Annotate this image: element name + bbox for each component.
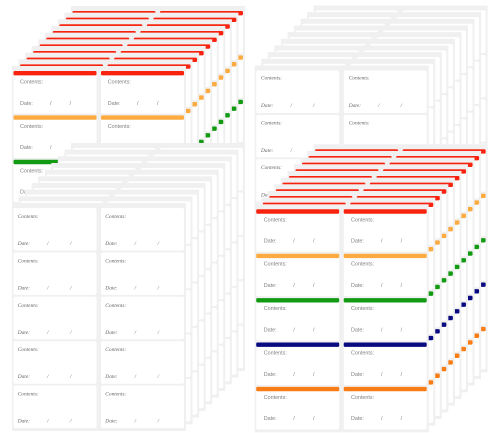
text: coloured labels, front sheet: /	[381, 416, 383, 422]
text: coloured labels, front sheet: /	[50, 101, 52, 107]
text: italic labels, front sheet: Contents:	[349, 76, 370, 82]
text: coloured labels, front sheet: Contents:	[20, 124, 43, 130]
text: italic labels, front sheet: /	[377, 103, 380, 109]
text: italic labels, front sheet: /	[69, 330, 72, 336]
text: coloured labels, front sheet: Contents:	[264, 395, 287, 401]
text: italic labels, front sheet: Date:	[348, 103, 361, 109]
text: coloured labels, front sheet: /	[401, 283, 403, 289]
text: coloured labels, front sheet: /	[381, 239, 383, 245]
text: italic labels, front sheet: /	[156, 419, 160, 425]
text: coloured labels, front sheet: /	[293, 239, 295, 245]
text: coloured labels, front sheet: /	[293, 372, 295, 378]
text: italic labels, front sheet: /	[46, 374, 49, 380]
text: coloured labels, front sheet: /	[313, 416, 315, 422]
text: coloured labels, front sheet: Date:	[264, 283, 277, 289]
panel: blank label stack, top right	[255, 5, 488, 293]
text: coloured labels, front sheet: /	[381, 327, 383, 333]
text: coloured labels, front sheet: Date:	[351, 416, 364, 422]
text: italic labels, front sheet: Date:	[104, 419, 118, 425]
text: italic labels, front sheet: /	[156, 374, 160, 380]
text: italic labels, front sheet: Date:	[104, 285, 118, 291]
text: italic labels, front sheet: /	[46, 330, 49, 336]
text: italic labels, front sheet: Contents:	[105, 347, 126, 353]
panel: coloured label stack, bottom right	[255, 144, 488, 432]
text: coloured labels, front sheet: Contents:	[108, 80, 131, 86]
text: italic labels, front sheet: /	[156, 241, 160, 247]
text: coloured labels, front sheet: Contents:	[20, 168, 43, 174]
text: coloured labels, front sheet: Date:	[20, 101, 33, 107]
text: coloured labels, front sheet: /	[50, 145, 52, 151]
text: italic labels, front sheet: Date:	[17, 285, 30, 291]
text: italic labels, front sheet: Date:	[260, 103, 273, 109]
text: italic labels, front sheet: Contents:	[261, 120, 282, 126]
text: coloured labels, front sheet: /	[313, 327, 315, 333]
text: coloured labels, front sheet: /	[381, 283, 383, 289]
text: coloured labels, front sheet: /	[137, 101, 139, 107]
text: coloured labels, front sheet: Contents:	[351, 350, 374, 356]
text: italic labels, front sheet: Date:	[104, 374, 118, 380]
text: italic labels, front sheet: /	[134, 419, 136, 425]
text: italic labels, front sheet: Contents:	[349, 120, 370, 126]
text: coloured labels, front sheet: Contents:	[264, 306, 287, 312]
text: coloured labels, front sheet: Contents:	[351, 262, 374, 268]
text: coloured labels, front sheet: Contents:	[264, 262, 287, 268]
text: italic labels, front sheet: Date:	[17, 374, 30, 380]
text: italic labels, front sheet: /	[134, 374, 136, 380]
text: coloured labels, front sheet: Date:	[264, 239, 277, 245]
text: italic labels, front sheet: /	[134, 285, 136, 291]
text: coloured labels, front sheet: Date:	[108, 101, 121, 107]
panel: coloured label stack, top left	[12, 6, 245, 294]
text: coloured labels, front sheet: Contents:	[351, 217, 374, 223]
text: coloured labels, front sheet: Date:	[351, 327, 364, 333]
text: coloured labels, front sheet: /	[313, 372, 315, 378]
text: italic labels, front sheet: Date:	[260, 148, 273, 154]
text: italic labels, front sheet: Contents:	[18, 347, 39, 353]
text: italic labels, front sheet: Contents:	[105, 214, 126, 220]
text: italic labels, front sheet: /	[290, 103, 292, 109]
text: italic labels, front sheet: /	[69, 241, 72, 247]
text: italic labels, front sheet: /	[290, 148, 292, 154]
text: coloured labels, front sheet: Date:	[20, 190, 33, 196]
text: coloured labels, front sheet: Contents:	[351, 395, 374, 401]
text: coloured labels, front sheet	[20, 80, 159, 196]
panel: blank label stack, bottom left	[12, 143, 245, 431]
text: italic labels, front sheet: /	[156, 285, 160, 291]
text: coloured labels, front sheet: /	[401, 416, 403, 422]
text: italic labels, front sheet: /	[134, 241, 136, 247]
text: italic labels, front sheet: /	[46, 419, 49, 425]
text: italic labels, front sheet: Contents:	[18, 392, 39, 398]
text: italic labels, front sheet: Contents:	[105, 303, 126, 309]
text: italic labels, front sheet: /	[400, 103, 402, 109]
text: italic labels, front sheet	[260, 76, 402, 198]
text: coloured labels, front sheet: /	[293, 283, 295, 289]
text: italic labels, front sheet: Date:	[17, 330, 30, 336]
text: italic labels, front sheet: /	[46, 285, 49, 291]
text: italic labels, front sheet: Date:	[17, 241, 30, 247]
text: italic labels, front sheet: Date:	[260, 192, 273, 198]
text: coloured labels, front sheet: Date:	[351, 283, 364, 289]
text: coloured labels, front sheet: /	[401, 327, 403, 333]
text: coloured labels, front sheet: /	[381, 372, 383, 378]
text: coloured labels, front sheet: Date:	[351, 372, 364, 378]
text: coloured labels, front sheet: Date:	[264, 416, 277, 422]
text: italic labels, front sheet: /	[134, 330, 136, 336]
text: italic labels, front sheet: /	[69, 419, 72, 425]
text: coloured labels, front sheet: Contents:	[264, 350, 287, 356]
text: italic labels, front sheet: /	[46, 241, 49, 247]
text: coloured labels, front sheet: /	[293, 327, 295, 333]
text: italic labels, front sheet: Date:	[17, 419, 30, 425]
text: italic labels, front sheet: Date:	[104, 241, 118, 247]
text: coloured labels, front sheet: /	[157, 101, 159, 107]
text: italic labels, front sheet: /	[156, 330, 160, 336]
text: coloured labels, front sheet: Contents:	[20, 80, 43, 86]
text: coloured labels, front sheet: Contents:	[108, 124, 131, 130]
text: italic labels, front sheet: /	[312, 103, 315, 109]
text: italic labels, front sheet: Contents:	[18, 258, 39, 264]
text: coloured labels, front sheet: /	[70, 101, 72, 107]
text: italic labels, front sheet: Contents:	[261, 76, 282, 82]
text: coloured labels, front sheet: /	[293, 416, 295, 422]
text: coloured labels, front sheet	[264, 217, 403, 422]
text: italic labels, front sheet: /	[69, 374, 72, 380]
text: coloured labels, front sheet: /	[401, 372, 403, 378]
text: coloured labels, front sheet: Contents:	[264, 217, 287, 223]
text: coloured labels, front sheet: Date:	[351, 239, 364, 245]
text: italic labels, front sheet: Contents:	[261, 165, 282, 171]
text: coloured labels, front sheet: Date:	[264, 372, 277, 378]
text: italic labels, front sheet	[17, 214, 160, 425]
text: coloured labels, front sheet: Date:	[20, 145, 33, 151]
text: coloured labels, front sheet: /	[313, 239, 315, 245]
text: italic labels, front sheet: Contents:	[18, 214, 39, 220]
text: coloured labels, front sheet: Date:	[264, 327, 277, 333]
text: italic labels, front sheet: /	[69, 285, 72, 291]
text: coloured labels, front sheet: Contents:	[351, 306, 374, 312]
text: italic labels, front sheet: Contents:	[105, 392, 126, 398]
text: italic labels, front sheet: Contents:	[18, 303, 39, 309]
text: italic labels, front sheet: Contents:	[105, 258, 126, 264]
text: coloured labels, front sheet: /	[401, 239, 403, 245]
text: italic labels, front sheet: Date:	[104, 330, 118, 336]
text: coloured labels, front sheet: /	[313, 283, 315, 289]
